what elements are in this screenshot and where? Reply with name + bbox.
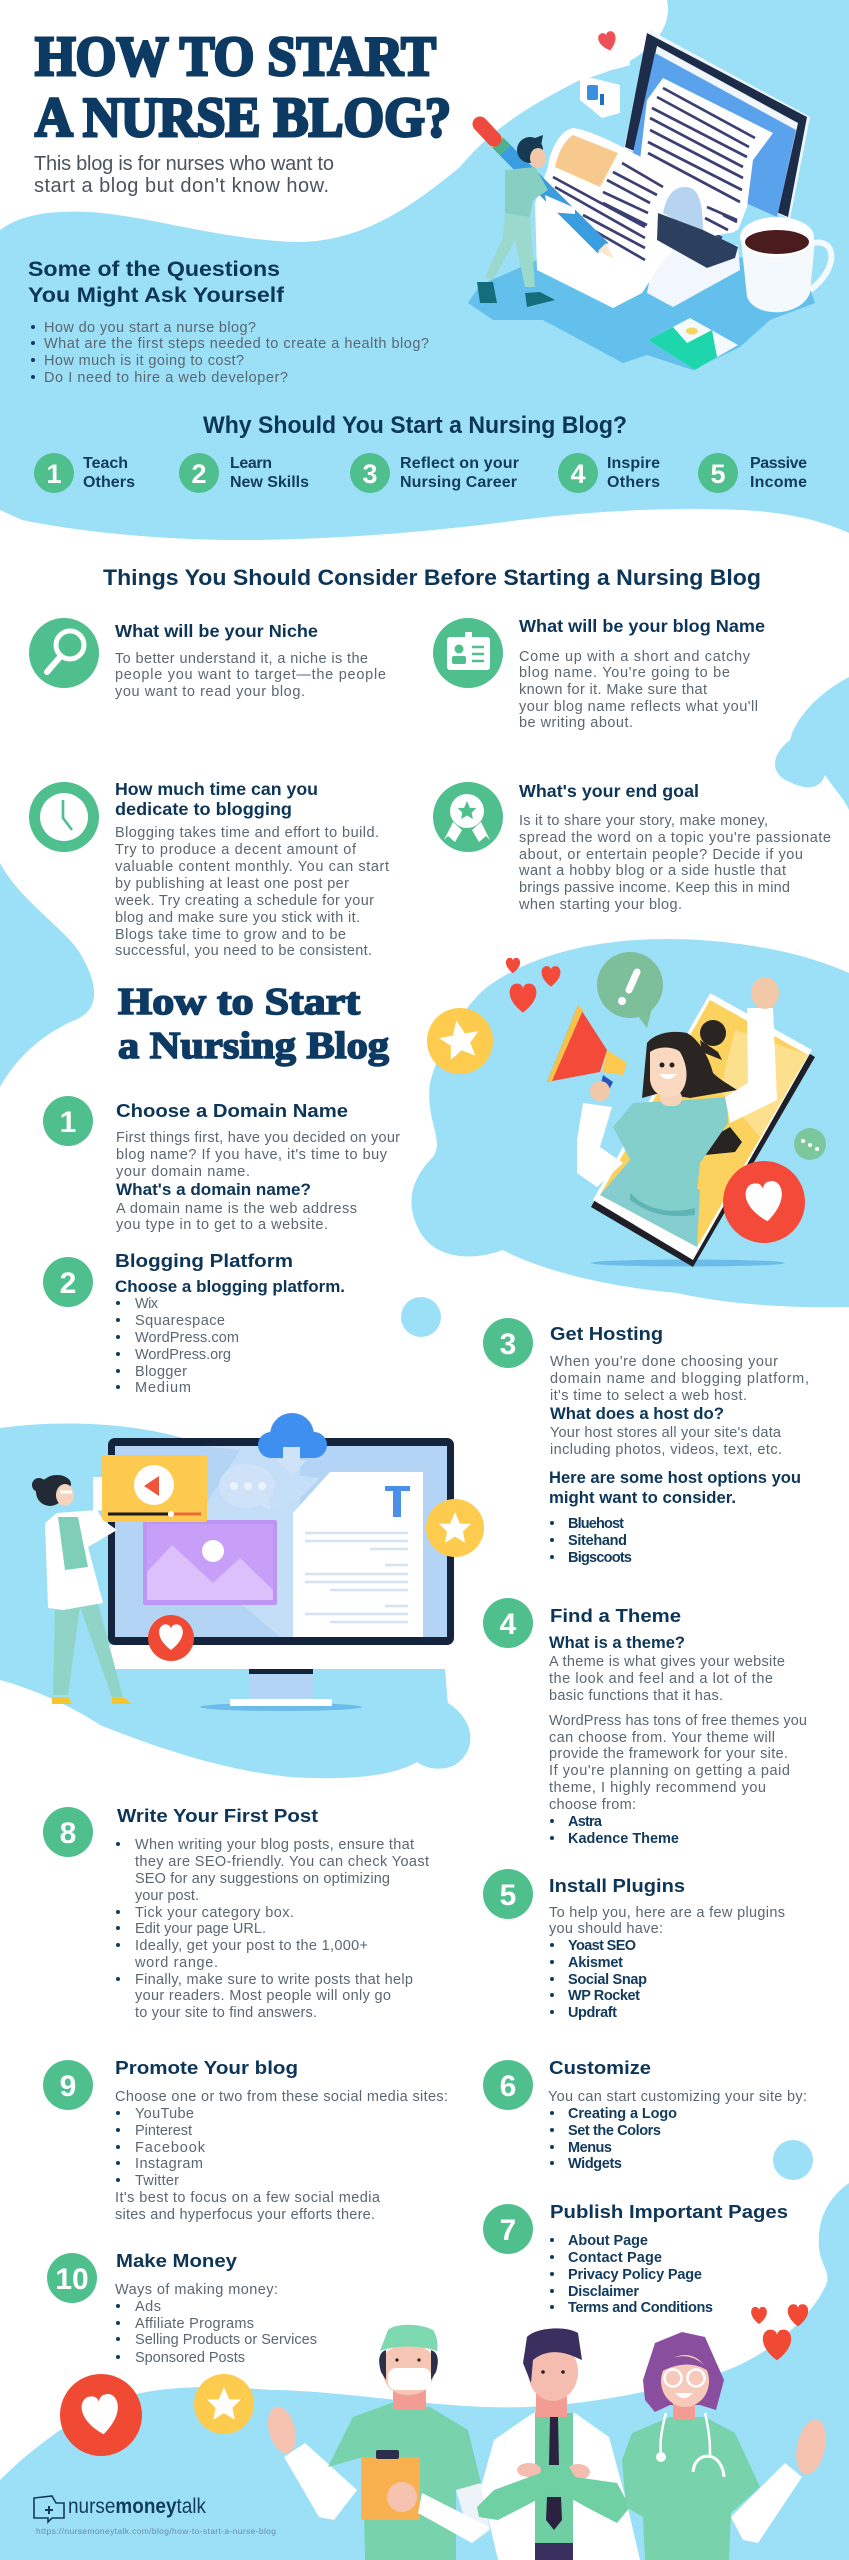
step 9 [43,2058,448,2223]
icon: hearts [751,2304,808,2360]
step 5: you should have: [549,1921,663,1937]
subtitle: start a blog but don't know how. [34,175,329,197]
reasons row: Teach [83,455,128,472]
step 4: Find a Theme [550,1606,681,1626]
step 3: Your host stores all your site's data [550,1425,782,1441]
step 3: 3 [500,1328,516,1361]
step 2: Blogger [135,1364,187,1380]
step 2: WordPress.com [135,1330,239,1346]
illustration: monitor with nurse [32,1413,484,1711]
reasons row [34,453,807,493]
step 6: Set the Colors [568,2123,661,2139]
step 8: Finally, make sure to write posts that help [135,1972,413,1988]
reasons row: Reflect on your [400,455,519,472]
step 2: Squarespace [135,1313,225,1329]
icon: heart badge [60,2374,142,2456]
questions list [31,320,429,386]
step 2: Choose a blogging platform. [115,1278,345,1296]
step 8: 8 [60,1817,76,1850]
subtitle: This blog is for nurses who want to [34,153,334,175]
step 3: What does a host do? [550,1405,724,1423]
panel: niche [29,618,386,700]
step 3: it's time to select a web host. [550,1388,747,1404]
step 9: YouTube [135,2106,194,2122]
panel: end goal: Is it to share your story, make money, [519,813,768,829]
reasons row: 5 [710,459,726,489]
panel: time: dedicate to blogging [115,799,292,819]
step 7: Publish Important Pages [550,2202,788,2222]
step 3: When you're done choosing your [550,1354,778,1370]
panel: time: valuable content monthly. You can start [115,859,389,875]
step 9: Choose one or two from these social media sites: [115,2089,448,2105]
reasons row: 2 [191,459,207,489]
reasons row: Income [750,474,807,491]
step 2: Wix [135,1296,159,1312]
step 5: Akismet [568,1955,623,1971]
step 7: Contact Page [568,2250,662,2266]
step 7: Terms and Conditions [568,2300,713,2316]
heading: why start: Why Should You Start a Nursing Blog? [203,412,627,439]
step 3: domain name and blogging platform, [550,1371,809,1387]
step 10: Ways of making money: [115,2282,278,2298]
step 4: A theme is what gives your website [549,1654,785,1670]
step 3: Sitehand [568,1533,627,1549]
step 10: Make Money [116,2251,237,2271]
step 10: Selling Products or Services [135,2332,317,2348]
questions list: Do I need to hire a web developer? [44,370,288,386]
step 4: Kadence Theme [568,1831,679,1847]
panel: end goal: spread the word on a topic you're passionate [519,830,831,846]
step 8: word range. [134,1955,218,1971]
step 4: the look and feel and a lot of the [549,1671,773,1687]
reasons row: Nursing Career [400,474,517,491]
step 6: You can start customizing your site by: [548,2089,807,2105]
step 1: you type in to get to a website. [116,1217,328,1233]
panel: niche: What will be your Niche [115,621,318,641]
step 9: Instagram [135,2156,203,2172]
step 2: WordPress.org [135,1347,231,1363]
panel: end goal [433,781,831,913]
step 5: WP Rocket [568,1988,640,2004]
step 3: including photos, videos, text, etc. [550,1442,782,1458]
step 7: Disclaimer [568,2284,639,2300]
panel: end goal: about, or entertain people? Decide if you [519,847,803,863]
step 5: Install Plugins [549,1876,685,1896]
step 4: Astra [568,1814,603,1830]
step 1: Choose a Domain Name [116,1101,348,1121]
heading: how to start a nursing blog: a Nursing Blog [118,1025,389,1067]
step 4: choose from: [549,1797,636,1813]
step 1: A domain name is the web address [116,1201,357,1217]
panel: blog name: What will be your blog Name [519,616,765,636]
step 2: Medium [135,1380,191,1396]
step 8: your post. [135,1888,199,1904]
step 9: Twitter [135,2173,179,2189]
subtitle [34,153,334,197]
step 8: Tick your category box. [135,1905,294,1921]
step 7: 7 [500,2214,516,2247]
step 8: Ideally, get your post to the 1,000+ [135,1938,368,1954]
reasons row: 4 [570,459,586,489]
step 10 [47,2251,317,2366]
panel: niche: you want to read your blog. [115,684,305,700]
step 10: Sponsored Posts [135,2350,245,2366]
heading: things to consider: Things You Should Consider Before Starting a Nursing Blog [103,565,761,590]
heading: questions: Some of the Questions [28,258,280,281]
questions list: What are the first steps needed to create a health blog? [44,336,429,352]
panel: time: successful, you need to be consistent. [115,943,372,959]
step 4: What is a theme? [549,1634,685,1652]
step 4: If you're planning on getting a paid [549,1763,790,1779]
panel: time: How much time can you [115,779,318,799]
reasons row: 3 [362,459,378,489]
icon: star badge [194,2374,254,2434]
step 8: your readers. Most people will only go [135,1988,391,2004]
title: HOW TO START [35,26,436,88]
step 7: Privacy Policy Page [568,2267,702,2283]
panel: blog name: known for it. Make sure that [519,682,707,698]
questions list: How do you start a nurse blog? [44,320,256,336]
step 2: 2 [60,1267,76,1300]
heading: how to start a nursing blog: How to Start [118,981,360,1023]
step 5: Updraft [568,2005,617,2021]
step 9: Pinterest [135,2123,192,2139]
step 1: blog name? If you have, it's time to buy [116,1147,388,1163]
step 5: 5 [500,1879,516,1912]
step 4: 4 [500,1608,517,1641]
reasons row: New Skills [230,474,309,491]
step 6 [483,2058,807,2172]
step 8 [43,1806,429,2021]
title: A NURSE BLOG? [35,87,451,149]
step 3: might want to consider. [549,1489,736,1507]
reasons row: Passive [750,455,807,472]
step 1: What's a domain name? [116,1181,311,1199]
panel: blog name: your blog name reflects what you'll [519,699,758,715]
heading: questions: You Might Ask Yourself [28,284,285,307]
step 7 [483,2202,788,2316]
step 1: First things first, have you decided on your [116,1130,400,1146]
step 1 [43,1096,400,1233]
step 1: 1 [60,1106,76,1139]
reasons row: Others [607,474,660,491]
step 7: About Page [568,2233,648,2249]
step 1: your domain name. [116,1164,250,1180]
reasons row: Others [83,474,135,491]
step 3: Bigscoots [568,1550,632,1566]
panel: time [29,779,389,959]
step 5: To help you, here are a few plugins [549,1905,785,1921]
step 8: When writing your blog posts, ensure that [135,1837,414,1853]
panel: end goal: want a hobby blog or a side hustle that [518,863,786,879]
source url: https://nursemoneytalk.com/blog/how-to-start-a-nurse-blog [36,2526,276,2536]
panel: blog name [433,616,765,731]
step 4 [483,1598,807,1847]
panel: niche: people you want to target—the people [115,667,386,683]
step 5 [483,1869,785,2021]
reasons row: Inspire [607,455,660,472]
step 2 [43,1251,345,1396]
step 6: Menus [568,2140,612,2156]
step 9: 9 [60,2070,76,2103]
step 10: Affiliate Programs [135,2316,254,2332]
logo [34,2495,206,2522]
title [35,26,451,149]
step 8: SEO for any suggestions on optimizing [135,1871,390,1887]
heading: how to start a nursing blog [118,981,389,1067]
step 4: WordPress has tons of free themes you [549,1713,807,1729]
panel: time: week. Try creating a schedule for your [114,893,374,909]
step 9: Promote Your blog [115,2058,298,2078]
illustration: three medical staff [263,2325,831,2560]
step 4: basic functions that it has. [549,1688,723,1704]
step 3: Bluehost [568,1516,624,1532]
step 9: sites and hyperfocus your efforts there. [115,2207,375,2223]
illustration: woman with megaphone in phone [427,952,826,1267]
step 8: Edit your page URL. [135,1921,266,1937]
step 2: Blogging Platform [115,1251,293,1271]
panel: time: by publishing at least one post per [115,876,349,892]
step 10: 10 [55,2263,89,2296]
step 6: 6 [500,2070,516,2103]
panel: blog name: be writing about. [519,715,633,731]
step 4: provide the framework for your site. [549,1746,788,1762]
step 6: Creating a Logo [568,2106,677,2122]
panel: end goal: brings passive income. Keep this in mind [519,880,790,896]
step 5: Social Snap [568,1972,647,1988]
step 9: It's best to focus on a few social media [115,2190,381,2206]
panel: blog name: blog name. You're going to be [519,665,730,681]
step 6: Widgets [568,2156,622,2172]
step 4: can choose from. Your theme will [549,1730,775,1746]
step 8: to your site to find answers. [135,2005,317,2021]
step 3: Get Hosting [550,1324,663,1344]
reasons row: 1 [46,459,62,489]
step 10: Ads [135,2299,161,2315]
panel: time: Blogging takes time and effort to build. [115,825,379,841]
panel: end goal: when starting your blog. [518,897,682,913]
logo: nursemoneytalk [68,2495,206,2518]
panel: time: blog and make sure you stick with it. [115,910,360,926]
step 8: they are SEO-friendly. You can check Yoast [135,1854,429,1870]
step 4: theme, I highly recommend you [549,1780,766,1796]
reasons row: Learn [230,455,272,472]
panel: end goal: What's your end goal [519,781,699,801]
illustration: nurse writing a blog at a computer [468,22,831,370]
questions list: How much is it going to cost? [44,353,244,369]
step 3: Here are some host options you [549,1469,801,1487]
panel: time: Blogs take time to grow and to be [115,927,346,943]
heading: questions [28,258,285,307]
panel: time: Try to produce a decent amount of [115,842,357,858]
step 5: Yoast SEO [568,1938,636,1954]
step 8: Write Your First Post [117,1806,318,1826]
step 9: Facebook [135,2140,206,2156]
panel: niche: To better understand it, a niche is the [115,651,368,667]
panel: blog name: Come up with a short and catchy [519,649,751,665]
step 3 [483,1318,809,1566]
step 6: Customize [549,2058,651,2078]
